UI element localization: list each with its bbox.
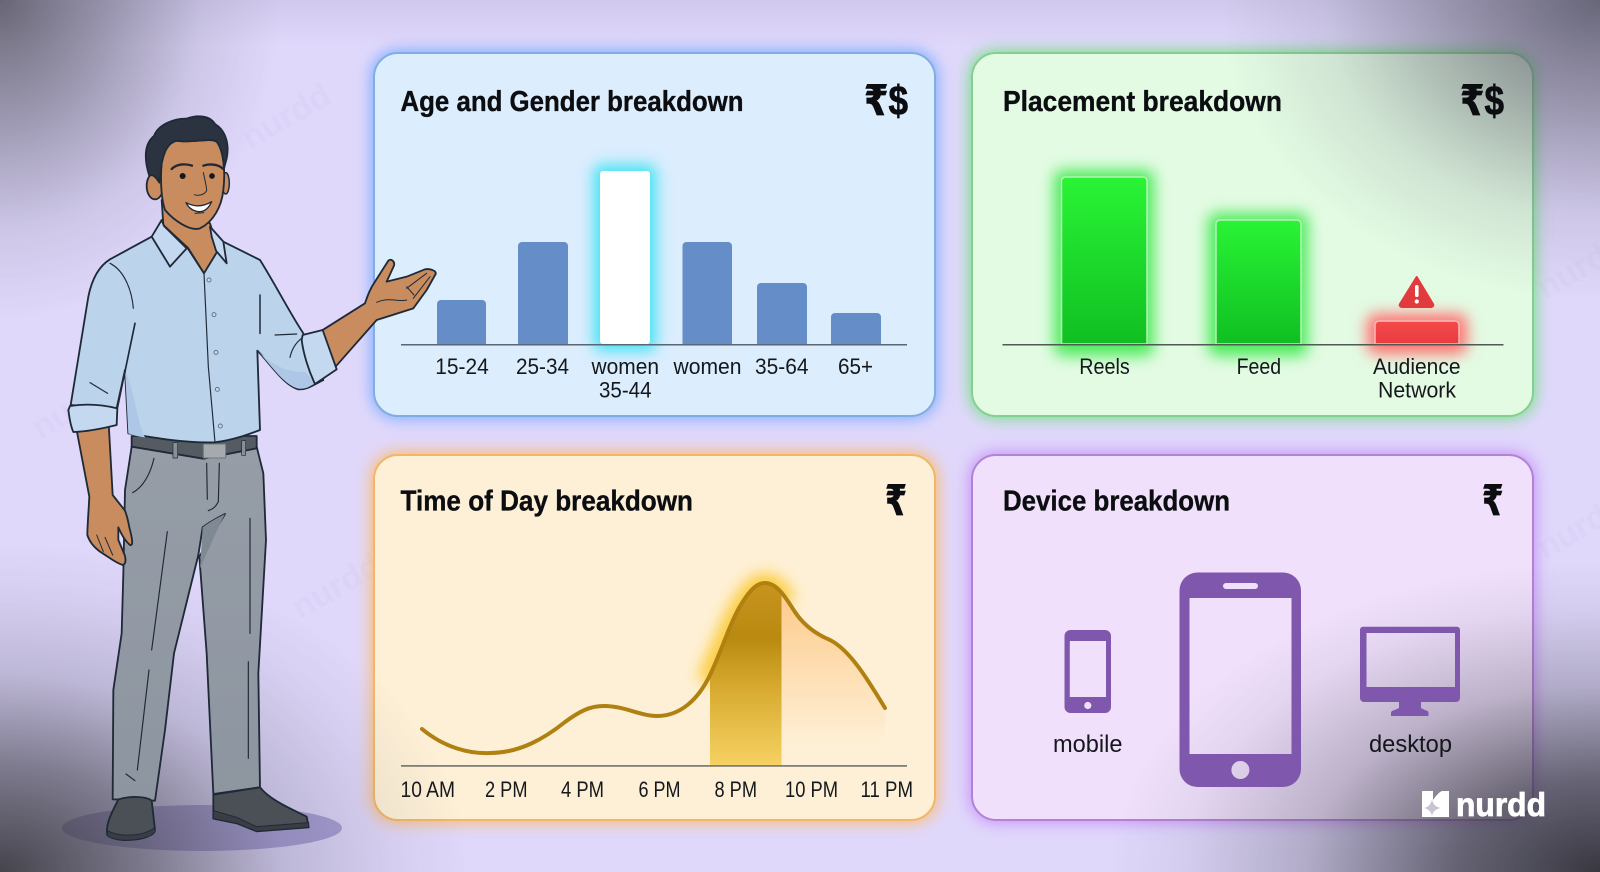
left shoe [107, 797, 155, 840]
panel: Age and Gender breakdown [372, 51, 937, 418]
belt [132, 436, 257, 459]
line chart: time of day: 11 PM [860, 777, 913, 802]
floor shadow [62, 805, 342, 851]
line chart: time of day: 8 PM [714, 777, 757, 802]
illustration: presenter man [68, 116, 436, 840]
bar chart: age and gender: 35-64 [755, 354, 808, 379]
man upper body [68, 116, 436, 459]
neck [162, 200, 218, 273]
collar [152, 220, 187, 267]
icon: large mobile [1180, 572, 1301, 787]
heading: Time of Day breakdown: Time of Day breakdown [400, 486, 693, 518]
line chart: time of day: 6 PM [638, 777, 680, 802]
shirt cuffs [68, 405, 117, 432]
bar chart: age and gender: 15-24 [435, 354, 489, 379]
bar chart: placement: Network [1378, 378, 1457, 402]
device breakdown contents [1003, 477, 1504, 787]
bar chart: placement [1002, 170, 1504, 402]
icon: warning triangle [1400, 277, 1433, 307]
shirt buttons [207, 278, 222, 428]
panel: Time of Day breakdown [372, 453, 937, 822]
line chart: time of day: 10 AM [400, 777, 455, 802]
left arm and hand [76, 423, 132, 565]
label: mobile: mobile [1053, 731, 1122, 758]
bar chart: age and gender: women [591, 354, 659, 379]
shirt fold lines [90, 263, 302, 442]
face [161, 140, 224, 229]
line chart: time of day: 10 PM [785, 777, 838, 802]
line chart: time of day: 4 PM [561, 777, 604, 802]
line chart: time of day: 2 PM [485, 777, 528, 802]
bar chart: age and gender: 35-44 [599, 378, 652, 402]
line chart: time of day [400, 575, 913, 802]
man lower body [76, 423, 309, 840]
bar chart: age and gender: 65+ [838, 354, 873, 379]
faint nurdd watermarks: nurdd [25, 366, 127, 447]
bar chart: placement: Reels [1079, 354, 1130, 379]
icon: placement rupee and dollar: ₹$ [1460, 77, 1504, 124]
heading: Placement breakdown: Placement breakdown [1003, 86, 1282, 118]
eyebrows, eyes, nose, mouth [172, 164, 223, 169]
heading: Device breakdown: Device breakdown [1003, 486, 1230, 518]
right shoe [213, 787, 309, 831]
hair [146, 116, 228, 183]
right forearm and open hand [320, 260, 436, 367]
bar chart: age and gender: 25-34 [516, 354, 569, 379]
heading: Age and Gender breakdown: Age and Gender breakdown [400, 86, 744, 118]
label: desktop: desktop [1369, 731, 1452, 758]
icon: desktop monitor [1360, 627, 1460, 716]
bar chart: placement: Audience [1373, 354, 1460, 379]
faint nurdd watermarks [25, 76, 1600, 627]
icon: rupee: ₹ [885, 477, 907, 524]
panel: Placement breakdown [970, 51, 1535, 418]
icon: rupee and dollar: ₹$ [864, 77, 908, 124]
shirt [71, 237, 323, 442]
icon: small mobile [1064, 630, 1111, 713]
bar chart: placement: Feed [1237, 354, 1281, 379]
panel: Device breakdown [970, 453, 1535, 822]
logo: nurdd: nurdd [1456, 786, 1546, 823]
bar chart: age and gender [401, 165, 907, 402]
bar chart: age and gender: women [673, 354, 742, 379]
faint nurdd watermarks: nurdd [235, 76, 337, 157]
trousers [113, 447, 266, 801]
faint nurdd watermarks: nurdd [285, 546, 387, 627]
icon: rupee: ₹ [1482, 477, 1504, 524]
ears [147, 173, 163, 199]
